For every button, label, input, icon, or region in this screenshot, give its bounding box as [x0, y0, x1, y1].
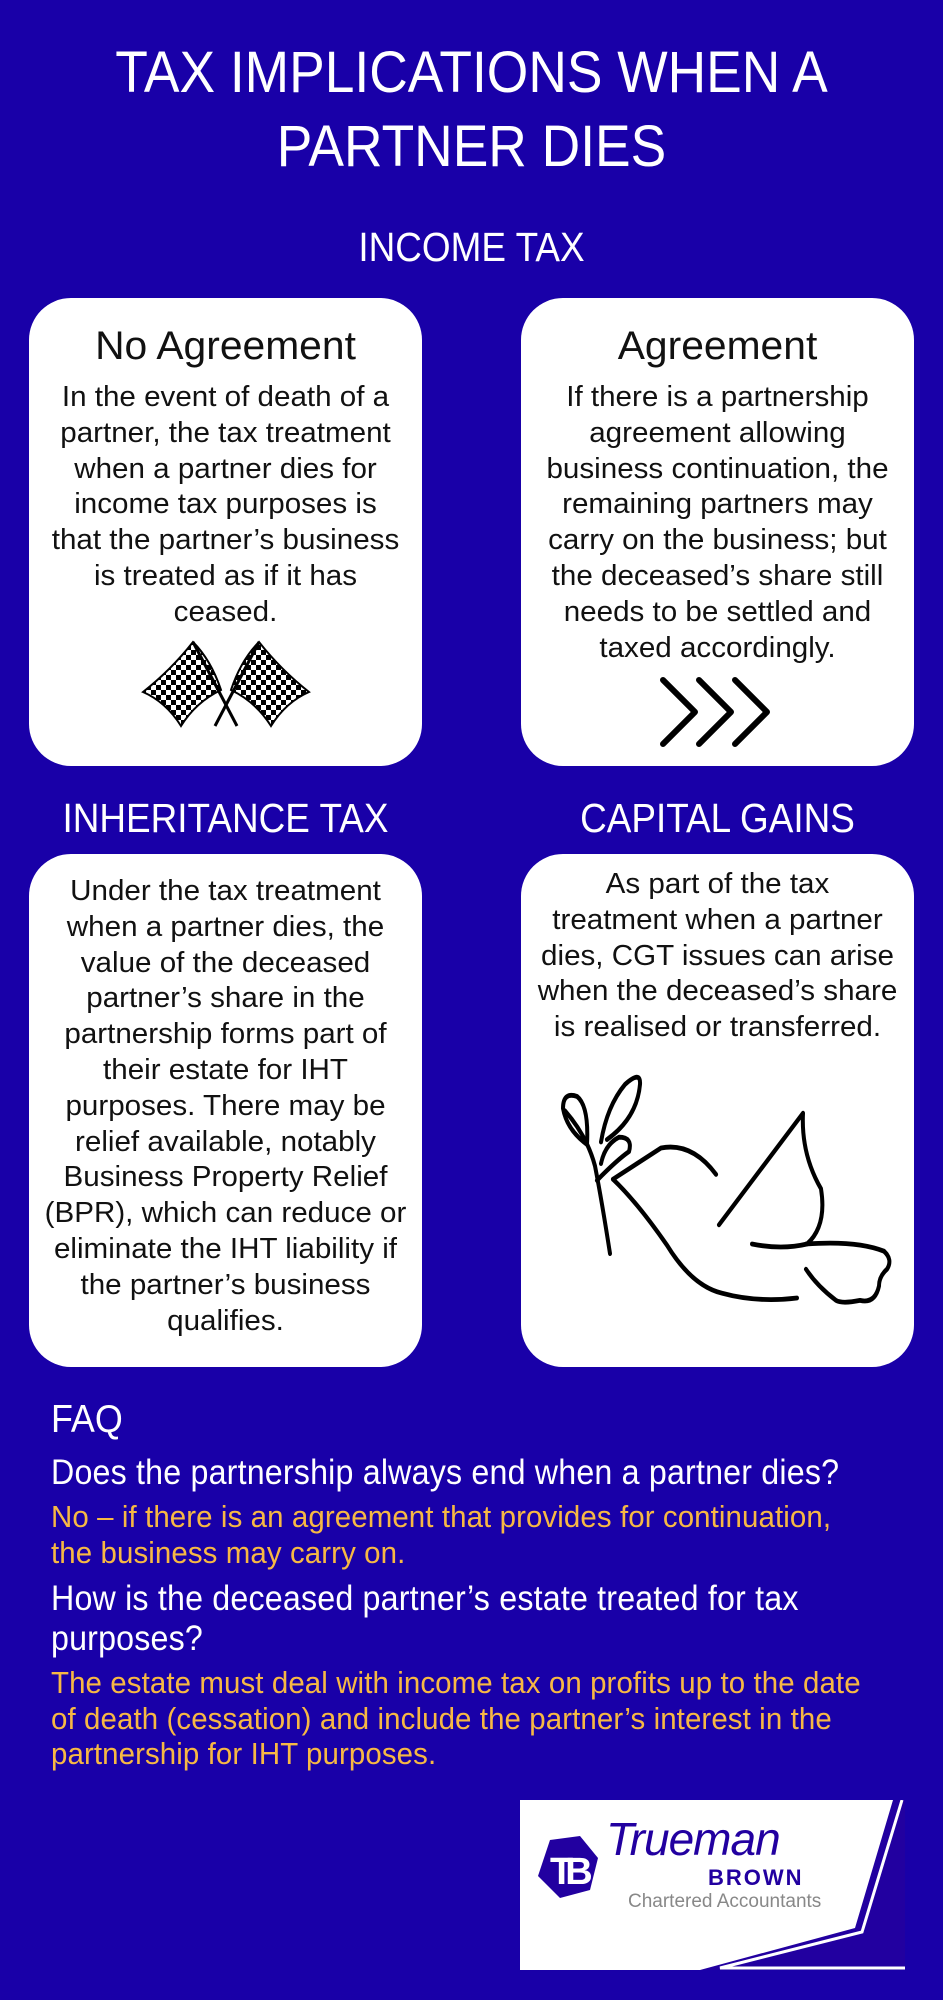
logo text: Chartered Accountants: Chartered Accountants	[628, 1891, 821, 1912]
text: capital gains: is realised or transferred.	[554, 1011, 881, 1043]
FAQ answer 2: partnership for IHT purposes.	[51, 1736, 436, 1771]
text: inheritance tax	[45, 875, 406, 1337]
FAQ answer 2: of death (cessation) and include the partner’s interest in the	[51, 1700, 832, 1736]
text: inheritance tax: qualifies.	[167, 1305, 284, 1337]
logo text: Trueman: Trueman	[606, 1813, 780, 1865]
text: inheritance tax: Under the tax treatment	[70, 875, 381, 907]
FAQ answer 2	[51, 1665, 861, 1771]
text: no agreement: income tax purposes is	[74, 488, 377, 520]
text: agreement: carry on the business; but	[548, 524, 887, 556]
text: capital gains: dies, CGT issues can arise	[541, 940, 894, 972]
icon: dove with olive branch	[561, 1074, 892, 1305]
text: agreement	[546, 381, 889, 664]
text: agreement: needs to be settled and	[564, 596, 871, 628]
panel: inheritance tax	[29, 854, 422, 1367]
panel: agreement	[521, 298, 914, 766]
text: agreement: business continuation, the	[546, 453, 889, 485]
logo: Trueman Brown: TB	[550, 1851, 591, 1893]
FAQ question 2	[51, 1579, 799, 1658]
text: inheritance tax: the partner’s business	[81, 1269, 370, 1301]
text: no agreement: partner, the tax treatment	[60, 417, 391, 449]
panel: capital gains	[521, 854, 914, 1367]
text: inheritance tax: their estate for IHT	[103, 1054, 348, 1086]
text: no agreement: that the partner’s business	[52, 524, 399, 556]
title: PARTNER DIES	[277, 114, 666, 179]
text: inheritance tax: when a partner dies, the	[67, 911, 384, 943]
title: TAX IMPLICATIONS WHEN A	[115, 40, 828, 105]
text: capital gains: when the deceased’s share	[538, 975, 897, 1007]
heading: agreement: Agreement	[618, 324, 817, 368]
text: inheritance tax: partner’s share in the	[86, 982, 365, 1014]
text: inheritance tax: Business Property Relief	[64, 1161, 387, 1193]
FAQ answer 1	[51, 1499, 831, 1570]
panel: no agreement	[29, 298, 422, 766]
FAQ question 2: How is the deceased partner’s estate treated for tax	[51, 1579, 799, 1618]
text: no agreement: In the event of death of a	[62, 381, 389, 413]
text: no agreement: ceased.	[174, 596, 277, 628]
heading: capital gains: CAPITAL GAINS	[580, 795, 855, 841]
FAQ answer 2: The estate must deal with income tax on profits up to the date	[51, 1665, 861, 1700]
text: no agreement: is treated as if it has	[94, 560, 357, 592]
text: inheritance tax: value of the deceased	[81, 947, 370, 979]
title	[115, 40, 828, 179]
text: inheritance tax: (BPR), which can reduce or	[45, 1197, 406, 1229]
text: inheritance tax: eliminate the IHT liability if	[54, 1233, 397, 1265]
text: no agreement	[52, 381, 399, 628]
text: capital gains: As part of the tax	[606, 868, 829, 900]
icon: chequered flags	[141, 640, 311, 728]
text: capital gains: treatment when a partner	[552, 904, 883, 936]
FAQ question 1: Does the partnership always end when a partner dies?	[51, 1453, 839, 1492]
FAQ question 2: purposes?	[51, 1619, 203, 1658]
text: inheritance tax: relief available, notably	[75, 1126, 376, 1158]
FAQ answer 1: No – if there is an agreement that provides for continuation,	[51, 1499, 831, 1534]
text: agreement: taxed accordingly.	[599, 632, 836, 664]
text: inheritance tax: purposes. There may be	[65, 1090, 386, 1122]
text: agreement: the deceased’s share still	[552, 560, 883, 592]
heading: inheritance tax: INHERITANCE TAX	[63, 795, 388, 841]
icon: chevrons	[660, 677, 770, 747]
text: inheritance tax: partnership forms part of	[64, 1018, 387, 1050]
FAQ heading: FAQ	[51, 1398, 123, 1441]
text: agreement: agreement allowing	[589, 417, 846, 449]
text: no agreement: when a partner dies for	[74, 453, 377, 485]
heading: income tax: INCOME TAX	[358, 224, 585, 270]
logo: Trueman Brown	[520, 1800, 905, 1970]
text: agreement: remaining partners may	[562, 488, 873, 520]
text: agreement: If there is a partnership	[566, 381, 869, 413]
FAQ answer 1: the business may carry on.	[51, 1534, 405, 1570]
text: capital gains	[538, 868, 897, 1043]
heading: no agreement: No Agreement	[95, 324, 356, 368]
logo text: BROWN: BROWN	[708, 1865, 804, 1890]
